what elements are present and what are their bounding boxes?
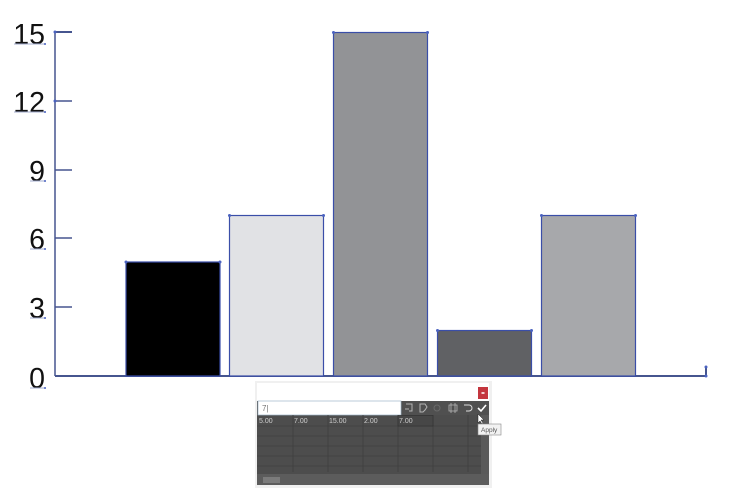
input text: 7| — [262, 404, 269, 413]
apply tooltip: Apply — [481, 427, 498, 434]
cell values — [259, 418, 413, 425]
close button — [478, 387, 488, 399]
cursor arrow — [478, 414, 484, 424]
cell values: 7.00 — [294, 418, 308, 425]
bar: value 7 mid grey — [542, 216, 636, 376]
cell values: 2.00 — [364, 418, 378, 425]
y axis labels — [13, 19, 45, 395]
scrollbars — [481, 415, 489, 485]
bar: value 2 — [438, 330, 532, 376]
axes and tick marks — [55, 32, 706, 376]
apply check icon — [478, 405, 486, 411]
panel body — [257, 401, 489, 485]
anchor points — [44, 30, 708, 389]
grid lines — [257, 415, 481, 472]
apply tooltip — [478, 424, 501, 435]
panel shadow — [255, 381, 492, 488]
y axis labels: 15 — [13, 19, 45, 51]
y axis labels: 3 — [29, 293, 45, 325]
cell values: 7.00 — [399, 418, 413, 425]
cell values: 15.00 — [329, 418, 347, 425]
bar: value 7 light — [230, 216, 324, 376]
y axis labels: 12 — [13, 87, 45, 119]
data editor panel — [255, 381, 501, 488]
selected cell — [398, 416, 433, 426]
y axis labels: 9 — [29, 156, 45, 188]
value input — [258, 401, 401, 415]
y axis labels: 0 — [29, 363, 45, 395]
toolbar icons — [405, 403, 472, 413]
toolbar — [257, 401, 489, 415]
cell values: 5.00 — [259, 418, 273, 425]
y axis label baselines — [14, 44, 46, 388]
panel title bar — [257, 383, 489, 401]
bar: value 15 — [334, 32, 428, 376]
y axis labels: 6 — [29, 224, 45, 256]
bar: value 5 — [126, 262, 220, 376]
